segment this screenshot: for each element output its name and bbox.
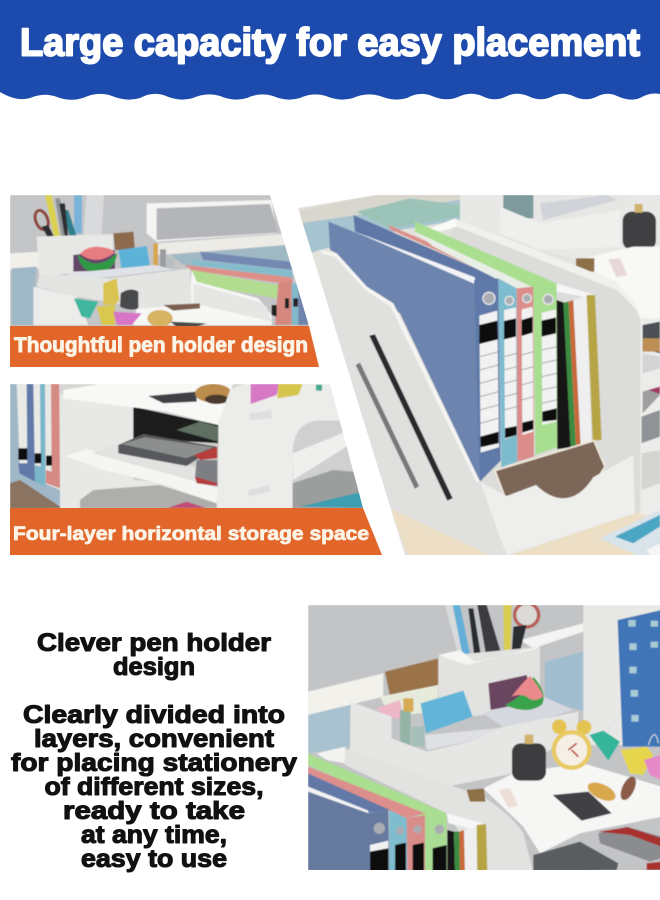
icon: watermelon [505,676,544,710]
label strips [479,307,557,453]
spine: pink [517,287,534,462]
icon: clips [251,384,322,404]
icon: clips [589,721,660,780]
binder: pink top [388,224,470,266]
panel: pen holder photo [10,195,319,367]
panel: magazine holder photo [293,190,660,563]
binder: green top [415,222,557,287]
text: clever pen holder heading [37,629,271,681]
label: Thoughtful pen holder design [10,326,319,367]
text: description: ready to take [63,797,245,825]
icon: calculator [118,434,217,466]
binders [308,753,487,872]
notebook [385,658,438,697]
header banner [0,0,660,100]
upper tray [502,195,616,250]
blue binder cover [328,222,480,482]
icon: alarm clock [552,719,592,770]
text: description: at any time, [81,821,227,849]
front lip [480,455,635,555]
icon: perfume [512,735,546,781]
spine: green [533,283,557,455]
page sliver [355,232,475,284]
text: description [11,701,297,873]
tray [350,702,578,790]
label: Thoughtful pen holder design: Thoughtful pen holder design [14,334,308,357]
slots [356,334,453,501]
left side panel [401,513,502,555]
text: description: layers, convenient [34,725,275,753]
desk items [467,774,639,821]
icon: stapler [194,447,217,486]
desktop shelf [483,763,660,853]
notepad [484,697,572,727]
shelf [587,246,660,318]
cosmetics [400,698,424,747]
files [557,283,602,449]
text: clever pen holder heading: Clever pen holder [37,629,271,657]
icon: watermelon [78,247,117,273]
label: Four-layer horizontal storage space [10,508,382,555]
text: description: Clearly divided into [23,701,285,729]
text: description: of different sizes, [44,773,264,801]
holder rim [345,748,533,872]
title: Large capacity for easy placement [20,22,640,64]
icon: binder clips [74,278,142,325]
text: description: for placing stationery [11,749,297,777]
right shelves [641,318,660,515]
text: clever pen holder heading: design [113,653,195,681]
label: Four-layer horizontal storage space: Four-layer horizontal storage space [13,524,369,545]
pens [445,605,541,654]
keyboard and stapler [533,827,660,872]
text: description: easy to use [81,845,227,873]
rings [483,292,553,305]
binder: blue back [353,215,498,281]
brochures [600,510,660,557]
panel: four-layer storage photo [10,384,382,555]
icon: binders [10,384,60,508]
spine: blue [474,278,501,482]
brown folder [495,441,605,502]
panel: desk organizer photo [308,603,660,872]
spine: teal [498,278,517,467]
monitor [583,605,660,747]
icon: perfume bottle [623,204,656,250]
icon: ruler and pens [33,195,104,238]
